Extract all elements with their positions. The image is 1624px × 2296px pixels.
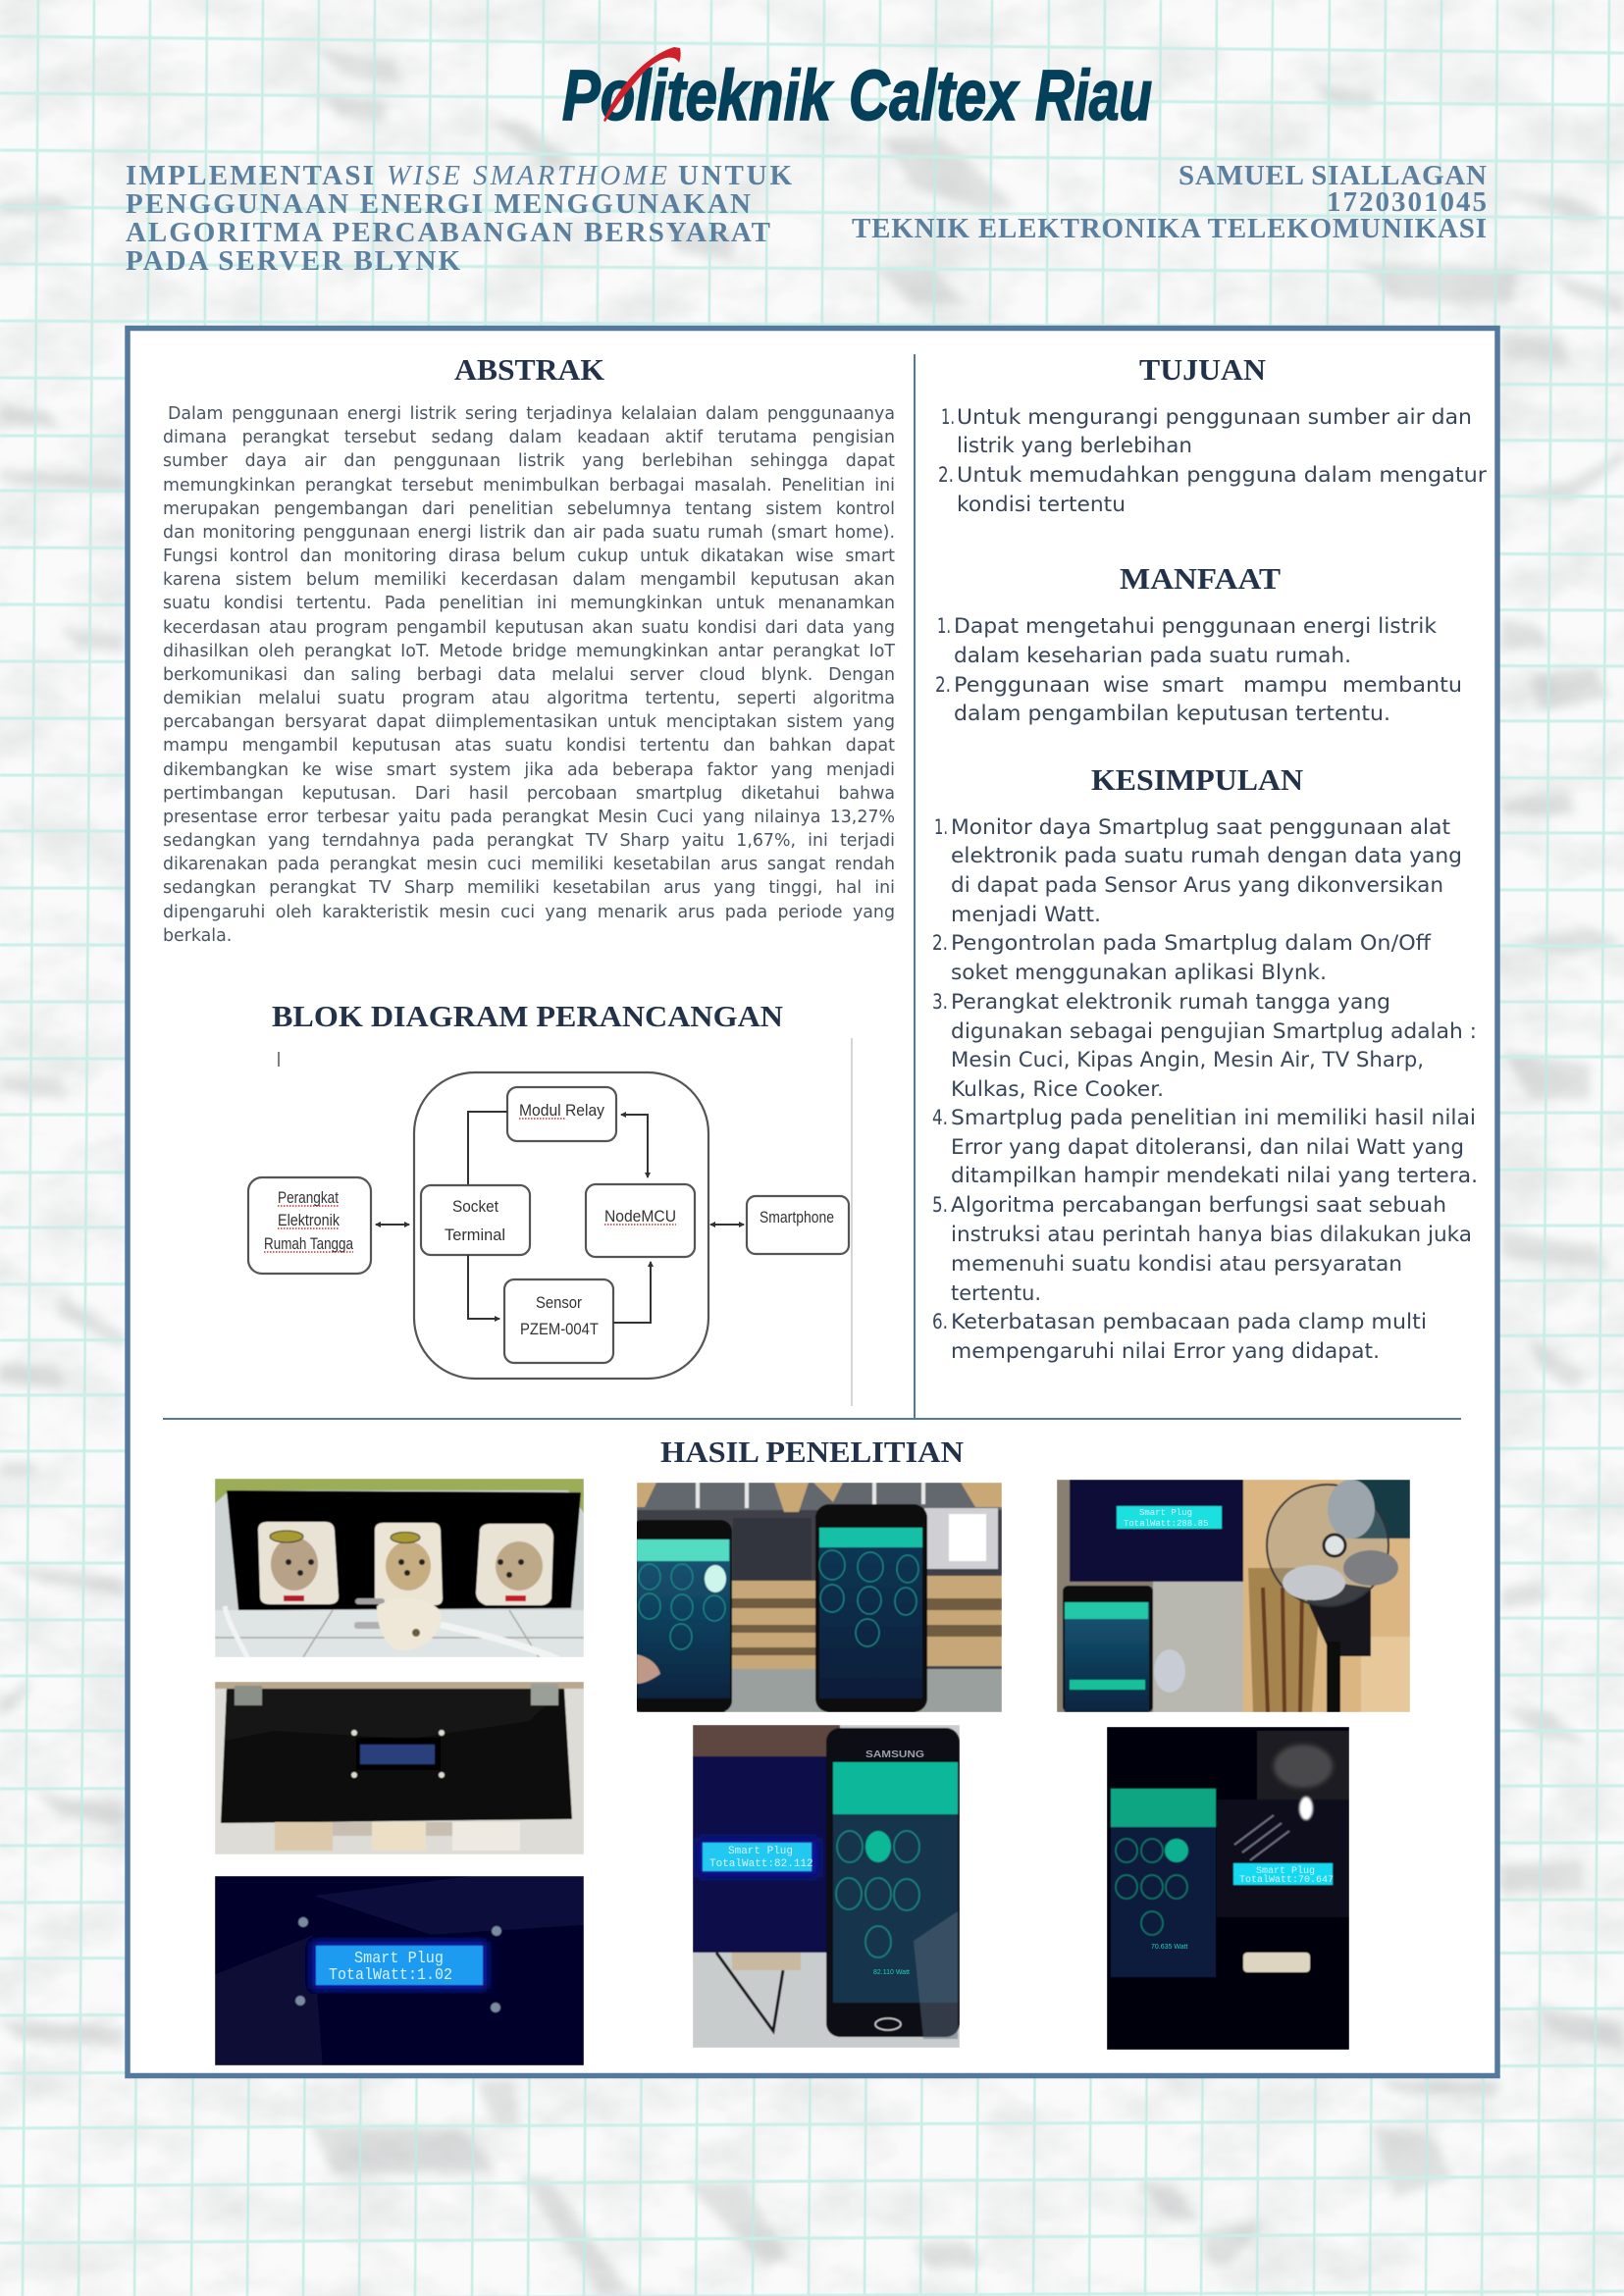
logo: Politeknik Caltex Riau: Politeknik [562, 57, 834, 135]
author block: 1720301045 [1327, 186, 1487, 218]
panel: kesimpulan: 6. [932, 1310, 948, 1333]
text block: abstrak: dan monitoring penggunaan energi listrik dan air pada suatu rumah (smart home). [163, 523, 895, 543]
text block: abstrak: Dalam penggunaan energi listrik sering terjadinya kelalaian dalam penggunaanya [168, 404, 895, 424]
panel: kesimpulan: Algoritma percabangan berfungsi saat sebuah [951, 1193, 1446, 1217]
heading: abstrak: ABSTRAK [454, 352, 604, 387]
text block: abstrak: pertimbangan keputusan. Dari hasil percobaan smartplug diketahui bahwa [163, 784, 895, 804]
title block: PENGGUNAAN ENERGI MENGGUNAKAN [126, 188, 751, 220]
panel: kesimpulan: digunakan sebagai pengujian Smartplug adalah : [951, 1019, 1477, 1043]
text block: abstrak: Fungsi kontrol dan monitoring dirasa belum cukup untuk dikatakan wise smart [163, 547, 895, 566]
panel: kesimpulan: 3. [932, 990, 948, 1014]
panel: kesimpulan: 5. [932, 1193, 948, 1217]
text block: abstrak [163, 404, 895, 946]
panel: kesimpulan: Pengontrolan pada Smartplug dalam On/Off [951, 931, 1432, 955]
text block: abstrak: kecerdasan atau program pengambil keputusan akan suatu kondisi dari data yang [163, 618, 895, 638]
panel: manfaat: membantu [1342, 673, 1462, 697]
panel: tujuan: Untuk memudahkan pengguna dalam mengatur [957, 463, 1487, 487]
heading: blok diagram: BLOK DIAGRAM PERANCANGAN [272, 999, 783, 1033]
panel: tujuan: 2. [938, 463, 954, 487]
panel: manfaat [935, 561, 1462, 725]
photo: acrylic lid with LCD [215, 1682, 584, 1854]
panel: kesimpulan: memenuhi suatu kondisi atau persyaratan [951, 1252, 1402, 1276]
text block: abstrak: demikian melalui suatu program atau algoritma tertentu, seperti algoritma [163, 689, 895, 708]
title block: UNTUK [678, 160, 792, 191]
text block: abstrak: memungkinkan perangkat tersebut menimbulkan berbagai masalah. Penelitian ini [163, 476, 895, 496]
panel: kesimpulan: ditampilkan hampir mendekati nilai yang tertera. [951, 1164, 1478, 1187]
section divider [163, 1418, 1461, 1420]
panel: manfaat: wise [1103, 673, 1149, 697]
block diagram: Modul Relay [519, 1101, 604, 1120]
panel: kesimpulan: Error yang dapat ditoleransi, dan nilai Watt yang [951, 1135, 1464, 1159]
panel: kesimpulan: Kulkas, Rice Cooker. [951, 1077, 1164, 1101]
panel: tujuan: 1. [941, 405, 955, 429]
photo: LCD total watt 1.02: Smart Plug [354, 1950, 444, 1968]
photo: LCD 70.647 with phone in dark [1107, 1727, 1349, 2050]
text block: abstrak: suatu kondisi tertentu. Pada penelitian ini memungkinkan untuk menanamkan [163, 594, 895, 613]
title block: WISE SMARTHOME [387, 160, 667, 191]
block diagram: Terminal [445, 1226, 505, 1244]
photo: LCD, phone and fan: TotalWatt:288.85 [1124, 1519, 1208, 1529]
photo: LCD, phone and fan [1057, 1480, 1410, 1712]
panel: kesimpulan: 4. [932, 1106, 948, 1129]
author block: SAMUEL SIALLAGAN [1179, 160, 1487, 191]
panel: kesimpulan [932, 762, 1478, 1363]
text block: abstrak: karena sistem belum memiliki kecerdasan dalam mengambil keputusan akan [163, 570, 895, 590]
block diagram: Perangkat [278, 1188, 339, 1207]
photo: two phones with blynk app [637, 1483, 1002, 1712]
block diagram: Elektronik [278, 1211, 340, 1229]
logo: Politeknik Caltex Riau [562, 47, 1152, 135]
panel: tujuan: Untuk mengurangi penggunaan sumber air dan [957, 405, 1472, 429]
text block: abstrak: berkomunikasi dan saling berbagi data melalui server cloud blynk. Dengan [163, 665, 895, 685]
panel: manfaat: Penggunaan [954, 673, 1090, 697]
photo: LCD 82.112 with phone: Smart Plug [728, 1846, 793, 1857]
text block: abstrak: sedangkan perangkat TV Sharp memiliki kesetabilan arus yang tinggi, hal ini [163, 878, 895, 898]
text block: abstrak: dikembangkan ke wise smart system jika ada beberapa faktor yang menjadi [163, 760, 895, 780]
panel: manfaat: dalam pengambilan keputusan tertentu. [954, 702, 1390, 725]
text block: abstrak: sumber daya air dan penggunaan listrik yang berlebihan sehingga dapat [163, 451, 895, 471]
text block: abstrak: dipengaruhi oleh karakteristik mesin cuci yang menarik arus pada periode yang [163, 903, 895, 922]
title block: PADA SERVER BLYNK [126, 245, 460, 277]
panel: kesimpulan: mempengaruhi nilai Error yang didapat. [951, 1339, 1380, 1363]
panel: tujuan: TUJUAN [1139, 352, 1266, 387]
panel: kesimpulan: Perangkat elektronik rumah tangga yang [951, 990, 1390, 1014]
author block [852, 160, 1487, 244]
block diagram: Smartphone [760, 1208, 834, 1226]
text block: abstrak: sedangkan yang terndahnya pada perangkat TV Sharp yaitu 1,67%, ini terjadi [163, 831, 895, 851]
panel: kesimpulan: KESIMPULAN [1091, 762, 1303, 797]
text block: abstrak: dihasilkan oleh perangkat IoT. Metode bridge memungkinkan antar perangkat IoT [163, 642, 895, 661]
panel: kesimpulan: elektronik pada suatu rumah dengan data yang [951, 844, 1462, 867]
panel: kesimpulan: instruksi atau perintah hanya bias dilakukan juka [951, 1223, 1472, 1246]
panel: kesimpulan: 1. [934, 815, 948, 839]
text block: abstrak: dimana perangkat tersebut sedang dalam keadaan aktif terutama pengisian [163, 428, 895, 447]
panel: kesimpulan: soket menggunakan aplikasi Blynk. [951, 961, 1327, 984]
text block: abstrak: percabangan bersyarat dapat diimplementasikan untuk menciptakan sistem yang [163, 712, 895, 732]
logo: Politeknik Caltex Riau: Riau [1035, 57, 1152, 135]
photo: LCD total watt 1.02: TotalWatt:1.02 [329, 1966, 452, 1985]
logo: Politeknik Caltex Riau: Caltex [849, 57, 1020, 135]
photo: LCD 70.647 with phone in dark: TotalWatt:70.647 [1239, 1874, 1334, 1886]
panel: manfaat: Dapat mengetahui penggunaan energi listrik [954, 614, 1438, 638]
block diagram: NodeMCU [604, 1207, 676, 1226]
photo: LCD 70.647 with phone in dark: 70.635 Watt [1151, 1944, 1188, 1951]
photo: LCD 82.112 with phone: 82.110 Watt [873, 1969, 910, 1976]
text block: abstrak: dikarenakan pada perangkat mesin cuci memiliki kesetabilan arus sangat rendah [163, 855, 895, 874]
panel: kesimpulan: Monitor daya Smartplug saat penggunaan alat [951, 815, 1450, 839]
photo: LCD 82.112 with phone [693, 1725, 960, 2048]
block diagram: Sensor [536, 1293, 582, 1312]
block diagram [248, 1038, 852, 1406]
panel: kesimpulan: Keterbatasan pembacaan pada clamp multi [951, 1310, 1427, 1333]
panel: kesimpulan: tertentu. [951, 1281, 1041, 1305]
photo: LCD total watt 1.02 [215, 1876, 584, 2065]
main panel frame [128, 328, 1497, 2076]
column divider [914, 354, 916, 1418]
panel: tujuan: listrik yang berlebihan [957, 434, 1192, 457]
panel: manfaat: smart [1162, 673, 1224, 697]
heading: hasil penelitian: HASIL PENELITIAN [660, 1435, 964, 1469]
panel: kesimpulan: Mesin Cuci, Kipas Angin, Mesin Air, TV Sharp, [951, 1048, 1424, 1071]
panel: manfaat: dalam keseharian pada suatu rumah. [954, 644, 1351, 667]
photo: LCD 82.112 with phone: SAMSUNG [865, 1749, 924, 1760]
panel: tujuan [938, 352, 1487, 516]
panel: manfaat: 1. [937, 614, 951, 638]
panel: kesimpulan: di dapat pada Sensor Arus yang dikonversikan [951, 873, 1443, 897]
photo: smart plug sockets [215, 1479, 584, 1657]
panel: kesimpulan: Smartplug pada penelitian ini memiliki hasil nilai [951, 1106, 1476, 1129]
text block: abstrak: mampu mengambil keputusan atas suatu kondisi tertentu dan bahkan dapat [163, 736, 895, 756]
block diagram: PZEM-004T [520, 1320, 599, 1338]
block diagram: Socket [452, 1197, 498, 1216]
panel: manfaat: 2. [935, 673, 951, 697]
author block: TEKNIK ELEKTRONIKA TELEKOMUNIKASI [852, 213, 1487, 244]
panel: tujuan: kondisi tertentu [957, 493, 1126, 516]
photo: LCD 82.112 with phone: TotalWatt:82.112 [709, 1858, 813, 1870]
text block: abstrak: presentase error terbesar yaitu pada perangkat Mesin Cuci yang nilainya 13,27% [163, 808, 895, 827]
text block: abstrak: merupakan pengembangan dari penelitian sebelumnya tentang sistem kontrol [163, 499, 895, 519]
title block: IMPLEMENTASI [126, 160, 374, 191]
panel: kesimpulan: 2. [932, 931, 948, 955]
title block: ALGORITMA PERCABANGAN BERSYARAT [126, 217, 770, 248]
panel: manfaat: MANFAAT [1120, 561, 1281, 596]
panel: manfaat: mampu [1243, 673, 1328, 697]
photo: LCD 70.647 with phone in dark: Smart Plug [1256, 1865, 1315, 1877]
panel: kesimpulan: menjadi Watt. [951, 903, 1101, 926]
text block: abstrak: berkala. [163, 926, 232, 946]
title block [126, 160, 792, 277]
photo: LCD, phone and fan: Smart Plug [1139, 1508, 1192, 1518]
block diagram: Rumah Tangga [264, 1234, 353, 1253]
